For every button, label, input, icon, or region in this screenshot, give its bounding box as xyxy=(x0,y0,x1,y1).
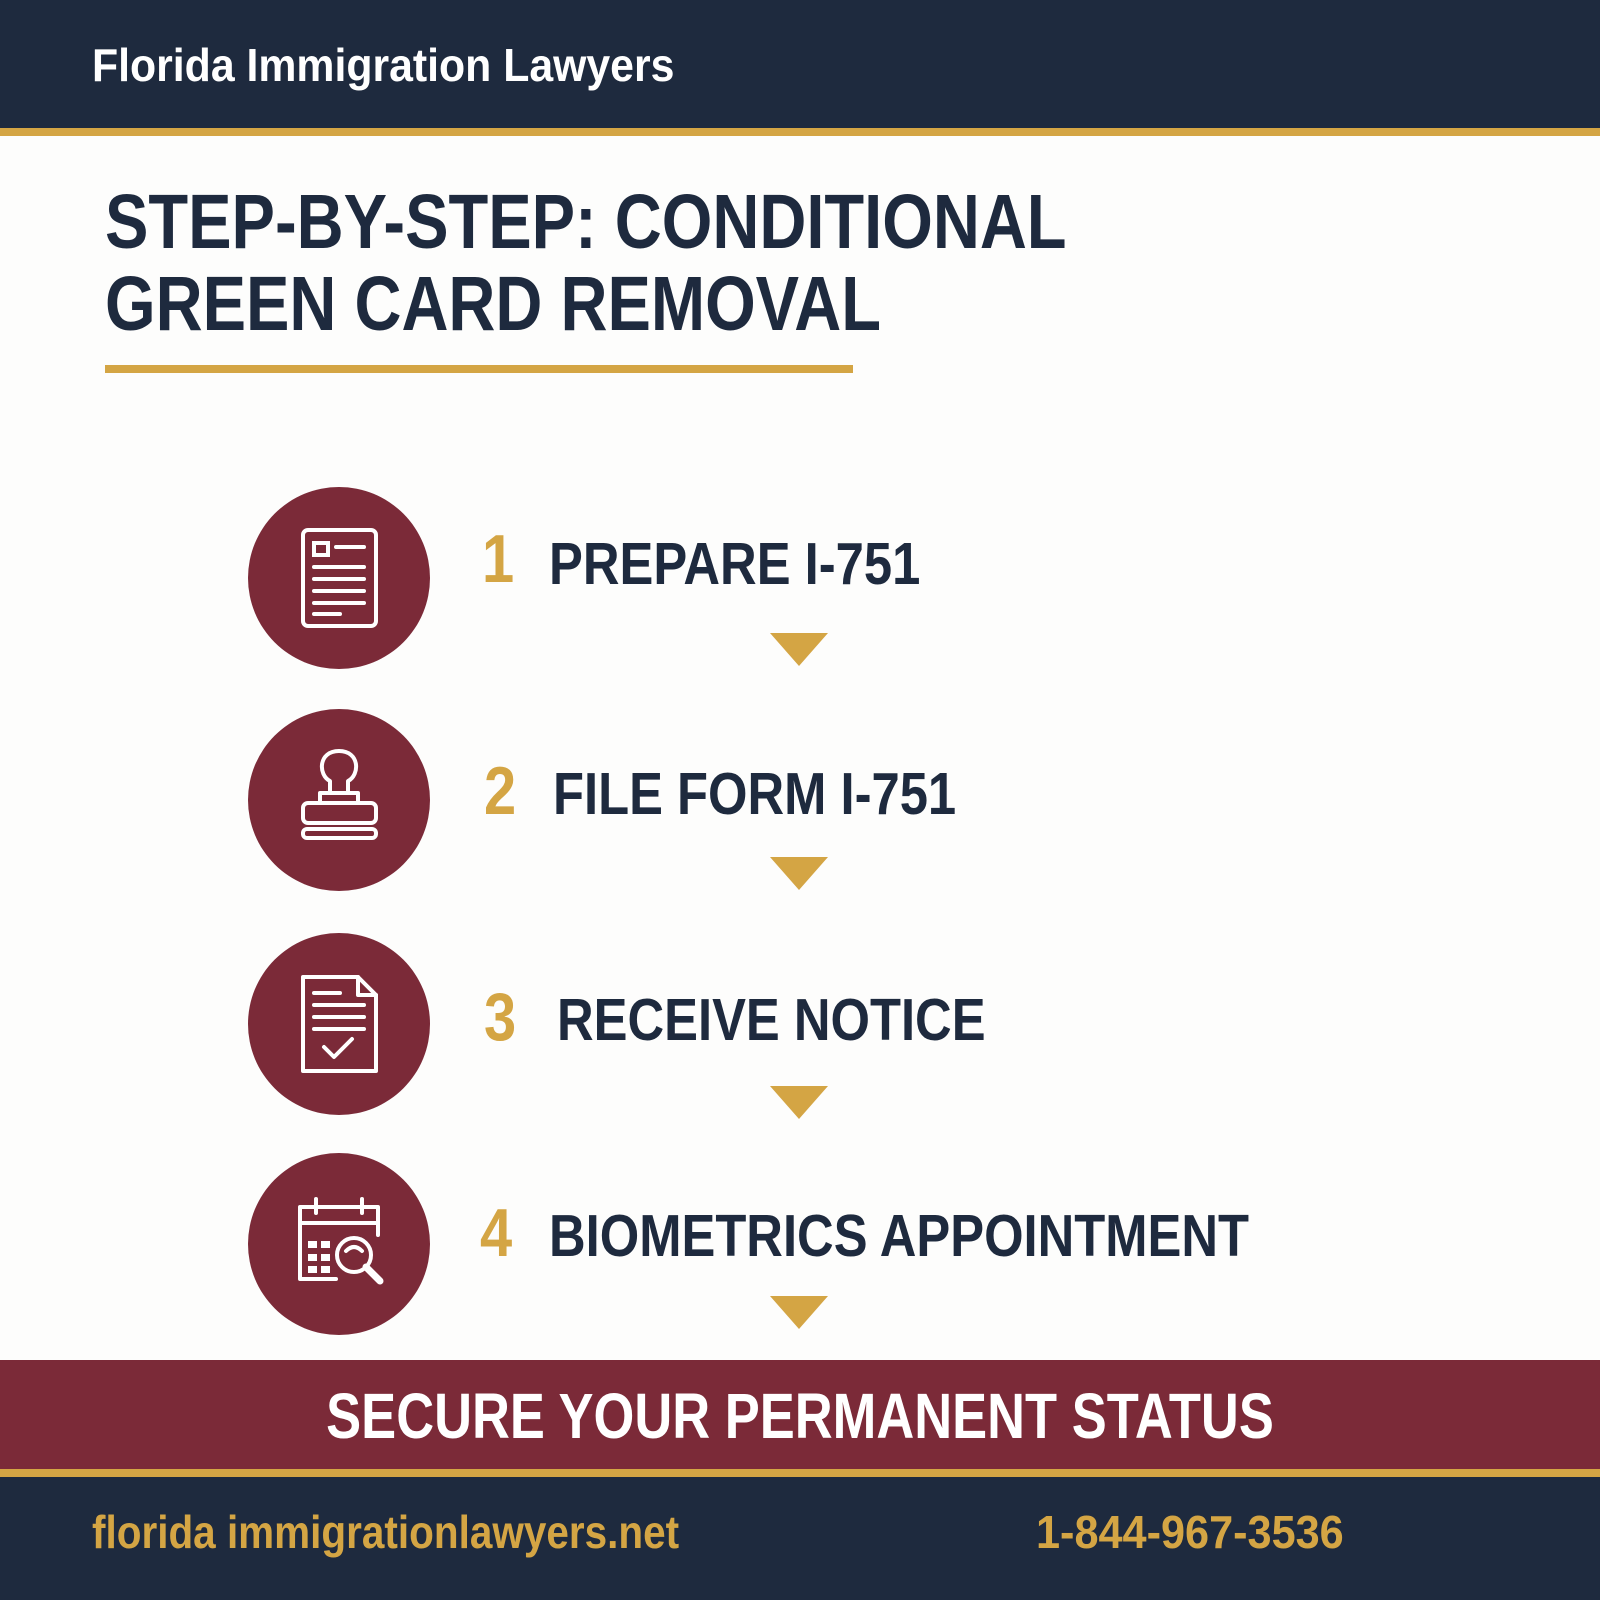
icon: approved notice xyxy=(248,933,430,1115)
title: GREEN CARD REMOVAL xyxy=(105,261,881,347)
header bar xyxy=(0,0,1600,128)
title xyxy=(105,179,1067,347)
arrow xyxy=(770,1296,828,1329)
step 1 xyxy=(248,487,920,669)
title underline xyxy=(105,365,853,373)
icon: document xyxy=(248,487,430,669)
arrow xyxy=(770,1086,828,1119)
phone: 1-844-967-3536 xyxy=(1036,1506,1344,1558)
arrow xyxy=(770,857,828,890)
icon: calendar search xyxy=(248,1153,430,1335)
step 2 xyxy=(248,709,956,891)
banner: secure status xyxy=(0,1360,1600,1469)
title: STEP-BY-STEP: CONDITIONAL xyxy=(105,179,1067,265)
label: FILE FORM I-751 xyxy=(553,761,956,827)
website: florida immigrationlawyers.net xyxy=(92,1506,679,1558)
header text: Florida Immigration Lawyers xyxy=(92,39,674,91)
label: PREPARE I-751 xyxy=(549,531,920,597)
label: RECEIVE NOTICE xyxy=(557,987,986,1053)
footer xyxy=(0,1477,1600,1600)
step 3 xyxy=(248,933,986,1115)
number 1: 1 xyxy=(482,521,514,597)
number 2: 2 xyxy=(484,753,516,829)
arrow xyxy=(770,633,828,666)
icon: stamp xyxy=(248,709,430,891)
step 4 xyxy=(248,1153,1249,1335)
banner text: SECURE YOUR PERMANENT STATUS xyxy=(326,1380,1274,1452)
number 3: 3 xyxy=(484,979,516,1055)
label: BIOMETRICS APPOINTMENT xyxy=(549,1203,1249,1269)
number 4: 4 xyxy=(480,1195,512,1271)
